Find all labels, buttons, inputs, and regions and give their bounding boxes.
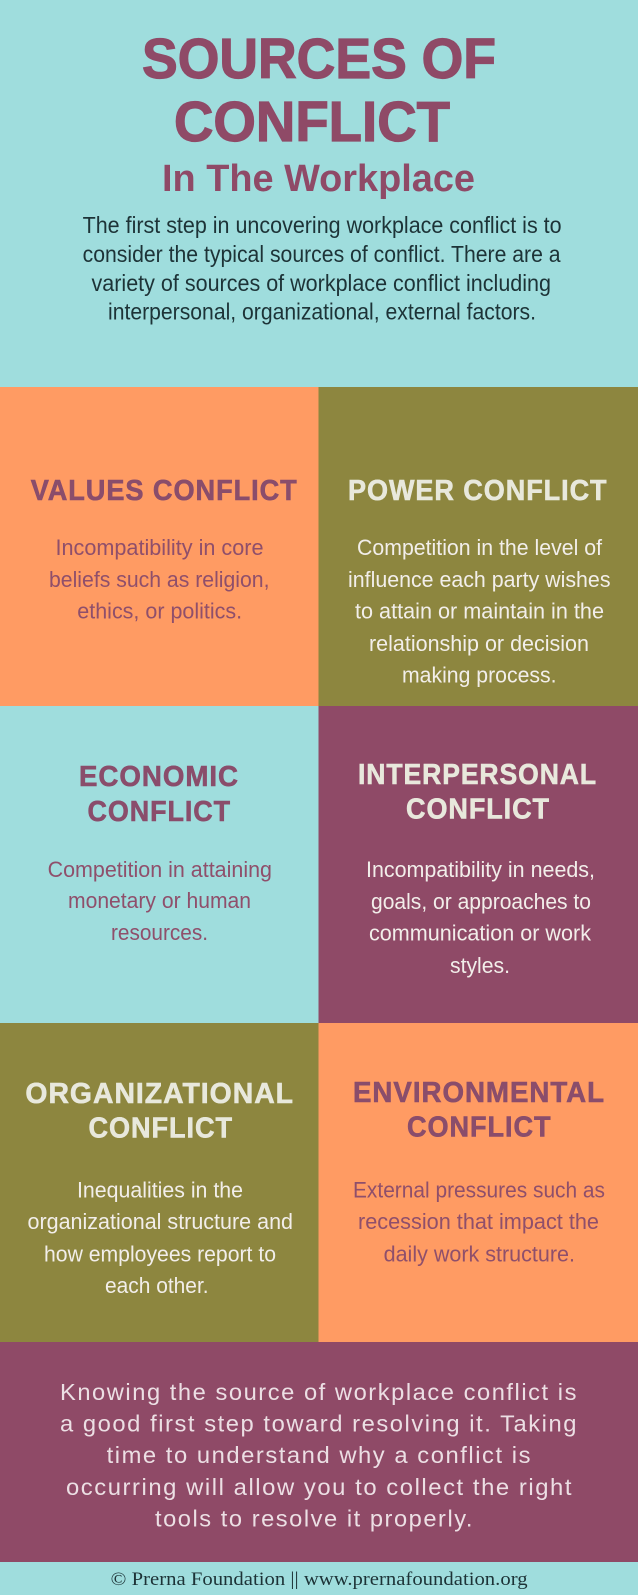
body: power conflict: relationship or decision	[369, 631, 589, 656]
body: interpersonal conflict: Incompatibility in needs,	[366, 857, 595, 882]
heading: economic conflict	[79, 761, 239, 828]
body: economic conflict: Competition in attaining	[48, 857, 272, 882]
heading: organizational conflict	[25, 1078, 294, 1145]
body: environmental conflict: External pressures such as	[353, 1178, 605, 1203]
heading: interpersonal conflict: CONFLICT	[406, 794, 550, 826]
closing text: tools to resolve it properly.	[155, 1506, 474, 1532]
title	[142, 27, 496, 154]
body: power conflict: influence each party wishes	[348, 567, 610, 592]
body: interpersonal conflict: styles.	[450, 953, 510, 978]
body: economic conflict: resources.	[111, 920, 208, 945]
panel: organizational conflict	[0, 1023, 318, 1342]
closing text: occurring will allow you to collect the right	[66, 1474, 573, 1500]
body: organizational conflict: each other.	[105, 1273, 209, 1298]
panel: values conflict	[0, 387, 318, 706]
heading: economic conflict: ECONOMIC	[79, 761, 239, 793]
panel: environmental conflict	[318, 1023, 638, 1342]
body: environmental conflict: daily work structure.	[384, 1242, 575, 1267]
body: power conflict: making process.	[402, 663, 556, 688]
body: values conflict: ethics, or politics.	[77, 599, 242, 624]
header panel	[0, 0, 638, 387]
heading: interpersonal conflict	[358, 759, 597, 826]
footer	[0, 1562, 638, 1595]
title: CONFLICT	[174, 90, 450, 154]
heading: organizational conflict: ORGANIZATIONAL	[25, 1078, 294, 1110]
heading: economic conflict: CONFLICT	[88, 796, 231, 828]
body: organizational conflict: Inequalities in the	[77, 1178, 243, 1203]
body: economic conflict	[48, 857, 272, 945]
intro text: variety of sources of workplace conflict including	[92, 270, 551, 296]
closing text: Knowing the source of workplace conflict is	[60, 1379, 578, 1405]
panel: closing message	[0, 1342, 638, 1562]
closing text: a good first step toward resolving it. Taking	[60, 1411, 578, 1437]
subtitle: In The Workplace	[162, 158, 475, 200]
body: power conflict	[348, 535, 610, 688]
heading: interpersonal conflict: INTERPERSONAL	[358, 759, 597, 791]
body: environmental conflict: recession that impact the	[358, 1209, 599, 1234]
panel: interpersonal conflict	[318, 706, 638, 1023]
heading: environmental conflict: CONFLICT	[407, 1112, 552, 1144]
body: values conflict: Incompatibility in core	[56, 535, 264, 560]
body: power conflict: to attain or maintain in the	[355, 599, 604, 624]
body: power conflict: Competition in the level of	[357, 535, 603, 560]
heading: power conflict: POWER CONFLICT	[348, 475, 608, 507]
panel: economic conflict	[0, 706, 318, 1023]
body: interpersonal conflict: communication or work	[369, 921, 592, 946]
closing text: time to understand why a conflict is	[107, 1442, 532, 1468]
footer credit: © Prerna Foundation || www.prernafoundation.org	[111, 1569, 528, 1590]
body: environmental conflict	[353, 1178, 605, 1267]
intro text: consider the typical sources of conflict. There are a	[83, 241, 561, 267]
body: organizational conflict: how employees report to	[44, 1242, 276, 1267]
closing text	[60, 1379, 578, 1532]
heading: organizational conflict: CONFLICT	[88, 1113, 233, 1145]
body: interpersonal conflict: goals, or approaches to	[371, 889, 591, 914]
body: organizational conflict: organizational structure and	[28, 1209, 293, 1234]
heading: environmental conflict	[353, 1077, 605, 1144]
body: values conflict: beliefs such as religion,	[49, 567, 270, 592]
intro text	[83, 212, 562, 324]
heading: values conflict: VALUES CONFLICT	[31, 475, 298, 507]
body: interpersonal conflict	[366, 857, 595, 978]
intro text: The first step in uncovering workplace conflict is to	[83, 212, 562, 238]
intro text: interpersonal, organizational, external factors.	[108, 298, 536, 324]
body: organizational conflict	[28, 1178, 293, 1298]
body: economic conflict: monetary or human	[68, 888, 251, 913]
body: values conflict	[49, 535, 270, 624]
panel: power conflict	[318, 387, 638, 706]
title: SOURCES OF	[142, 27, 496, 91]
heading: environmental conflict: ENVIRONMENTAL	[353, 1077, 605, 1109]
